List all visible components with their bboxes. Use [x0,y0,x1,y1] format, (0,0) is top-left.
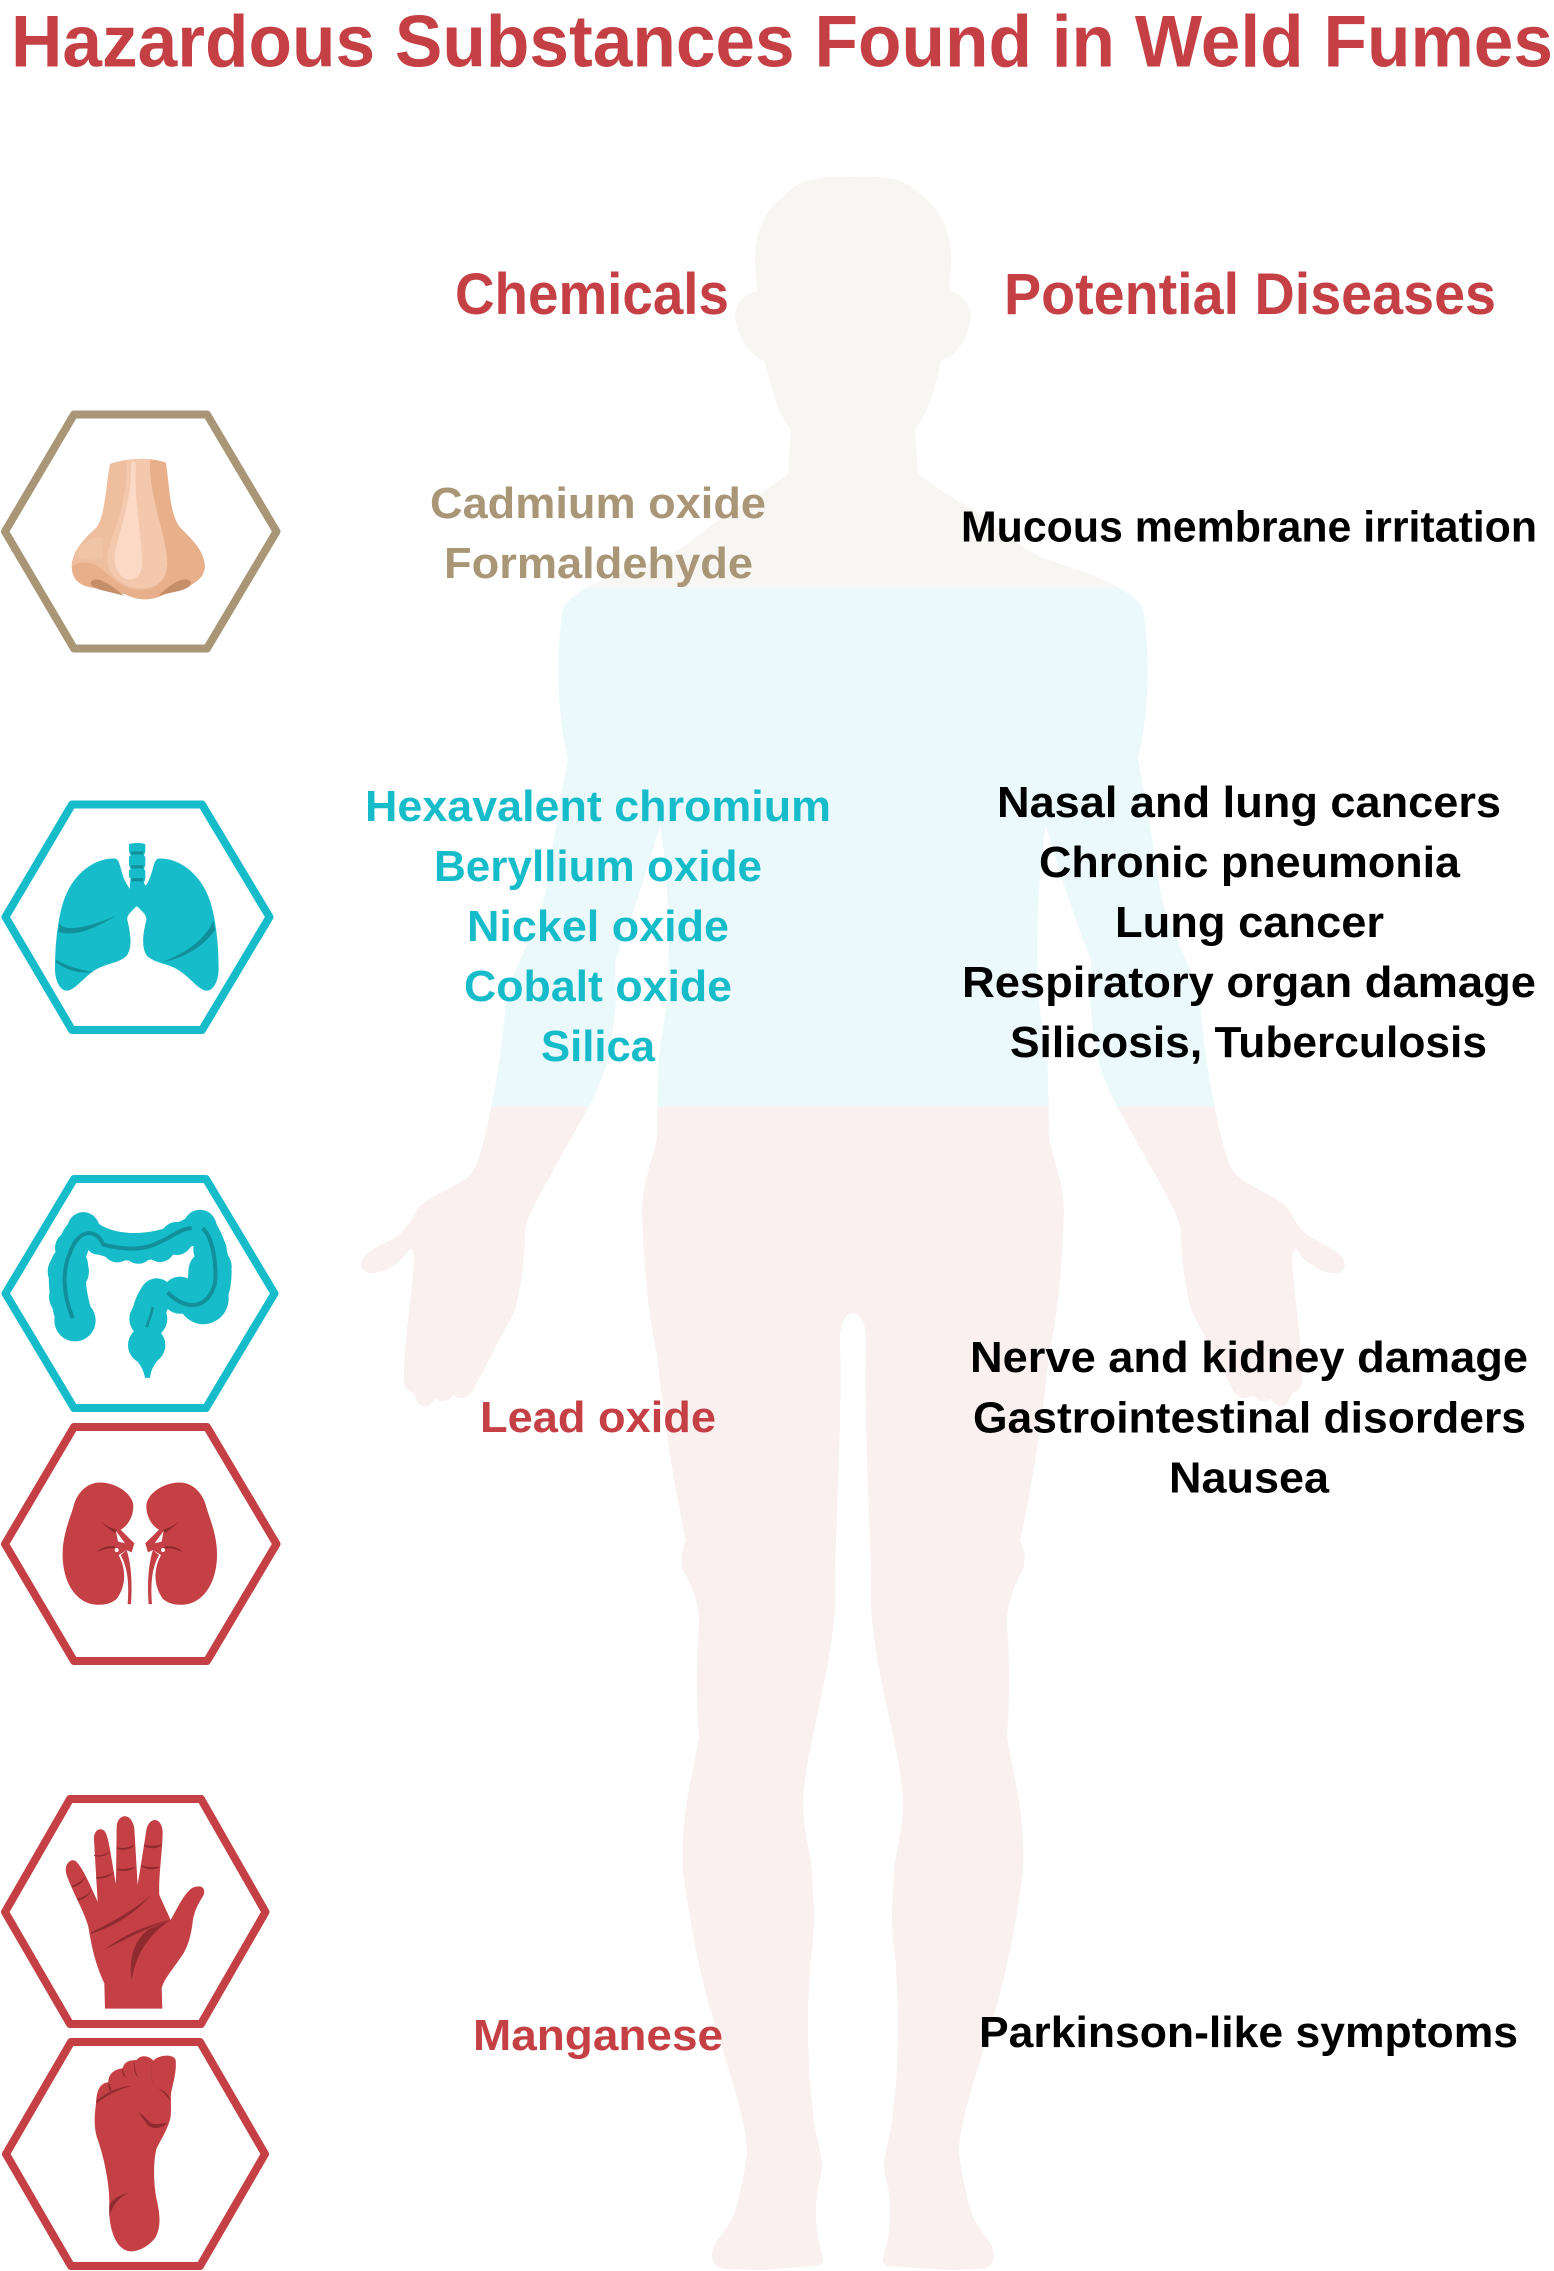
lung cancer: Lung cancer [1115,898,1384,947]
diseases: lead group [970,1333,1528,1502]
cobalt oxide: Cobalt oxide [464,962,732,1011]
disease: parkinson-like symptoms: Parkinson-like symptoms [979,2008,1518,2057]
beryllium oxide: Beryllium oxide [434,842,762,891]
disease: mucous membrane irritation: Mucous membrane irritation [961,502,1537,552]
icon: lungs in hexagon [6,804,270,1030]
chemical: lead oxide: Lead oxide [480,1393,716,1442]
nausea: Nausea [1169,1454,1330,1502]
silicosis, tuberculosis: Silicosis, Tuberculosis [1010,1018,1487,1067]
chemicals: nose group [430,479,766,588]
silica: Silica [541,1022,656,1071]
chemicals: lung group [365,782,831,1071]
icon: kidneys in hexagon [5,1427,276,1661]
formaldehyde: Formaldehyde [444,539,753,588]
diseases: lung group [962,778,1536,1067]
cadmium oxide: Cadmium oxide [430,479,766,528]
icon: hand in hexagon [5,1799,266,2024]
title: Hazardous Substances Found in Weld Fumes [11,2,1553,82]
chemical: manganese: Manganese [473,2011,723,2060]
gastrointestinal disorders: Gastrointestinal disorders [973,1394,1526,1442]
heading: chemicals: Chemicals [455,262,729,327]
hexavalent chromium: Hexavalent chromium [365,782,831,831]
icon: intestine in hexagon [6,1179,274,1408]
nerve and kidney damage: Nerve and kidney damage [970,1333,1528,1382]
body silhouette [340,170,1370,2271]
respiratory organ damage: Respiratory organ damage [962,958,1536,1007]
nickel oxide: Nickel oxide [467,902,729,951]
icon: foot in hexagon [6,2042,265,2266]
nasal and lung cancers: Nasal and lung cancers [997,778,1501,827]
icon: nose in hexagon [5,414,276,648]
heading: potential diseases: Potential Diseases [1004,262,1496,327]
chronic pneumonia: Chronic pneumonia [1039,838,1461,887]
